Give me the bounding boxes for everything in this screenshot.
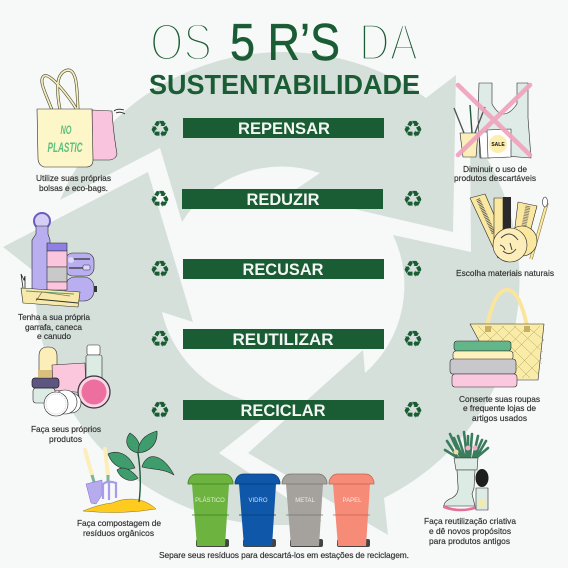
bin: metal <box>282 474 327 547</box>
caption: reuse: para produtos antigos <box>429 536 510 546</box>
caption: cosmetics <box>31 424 101 444</box>
illustration: recycling bins <box>188 474 374 547</box>
icons: recycling symbols right: ♻ <box>403 187 423 213</box>
caption: reuse: e dê novos propósitos <box>429 526 511 536</box>
bar: reutilizar <box>183 329 384 349</box>
caption: bottle: Tenha a sua própria <box>18 312 90 322</box>
illustration: plastic bag crossed out: SALE <box>491 142 505 148</box>
bin: vidro: VIDRO <box>248 498 268 504</box>
bin: papel: PAPEL <box>343 498 362 504</box>
caption: compost: Faça compostagem de <box>77 518 161 528</box>
illustration: plastic bag crossed out <box>454 83 531 158</box>
caption: clothes: artigos usados <box>472 413 527 423</box>
caption: bins: Separe seus resíduos para descartá-los em estações de reciclagem. <box>159 550 409 560</box>
title line 1: OS <box>150 14 212 72</box>
caption: bottle <box>18 312 90 341</box>
caption: disposable <box>454 164 536 183</box>
illustration: boot planter <box>443 432 488 511</box>
caption: compost <box>77 518 161 538</box>
bar: reciclar <box>183 400 384 420</box>
bar: recusar <box>183 259 384 279</box>
caption: bags: bolsas e eco-bags. <box>39 183 108 193</box>
bar: reduzir <box>182 189 383 209</box>
illustration: handbag and folded clothes <box>450 290 544 387</box>
bar: repensar <box>183 118 384 138</box>
caption: cosmetics: Faça seus próprios <box>31 424 101 434</box>
icons: recycling symbols left <box>150 117 170 424</box>
icons: recycling symbols left: ♻ <box>150 257 170 283</box>
caption: compost: resíduos orgânicos <box>83 528 154 538</box>
illustration: plant and garden tools <box>83 431 174 513</box>
bar: reciclar: RECICLAR <box>240 401 326 420</box>
title: 5 R’S <box>230 14 340 72</box>
title line 2: SUSTENTABILIDADE <box>149 69 420 100</box>
illustration: tote bags <box>37 70 125 167</box>
illustration: cosmetics <box>32 345 110 416</box>
icons: recycling symbols left: ♻ <box>150 327 170 353</box>
icons: recycling symbols left: ♻ <box>150 187 170 213</box>
caption: disposable: Diminuir o uso de <box>463 164 527 174</box>
caption: clothes: e frequente lojas de <box>463 403 536 413</box>
caption: bags: Utilize suas próprias <box>36 173 111 183</box>
icons: recycling symbols right: ♻ <box>403 327 423 353</box>
bin: papel <box>329 474 374 547</box>
illustration: tote bags: NO <box>60 123 72 137</box>
bin: plástico <box>188 474 233 547</box>
caption: cosmetics: produtos <box>49 434 82 444</box>
illustration: bottle, cup, straws <box>21 213 97 307</box>
title <box>150 14 418 72</box>
caption: clothes <box>459 394 540 423</box>
title: DA <box>359 14 418 72</box>
caption: bottle: e canudo <box>37 331 71 341</box>
bar: repensar: REPENSAR <box>238 119 330 138</box>
icons: recycling symbols left: ♻ <box>150 398 170 424</box>
bar: reduzir: REDUZIR <box>246 190 320 209</box>
illustration: natural combs and sponge <box>470 194 548 262</box>
bin: plástico: PLÁSTICO <box>195 497 225 504</box>
caption: bags <box>36 173 111 193</box>
bar: reutilizar: REUTILIZAR <box>232 330 334 349</box>
icons: recycling symbols left: ♻ <box>150 117 170 143</box>
caption: bottle: garrafa, caneca <box>25 322 82 332</box>
bin: vidro <box>235 474 280 547</box>
bar: recusar: RECUSAR <box>242 260 324 279</box>
icons: recycling symbols right <box>403 117 423 424</box>
caption: reuse <box>424 516 516 546</box>
caption: disposable: produtos descartáveis <box>454 173 536 183</box>
icons: recycling symbols right: ♻ <box>403 117 423 143</box>
icons: recycling symbols right: ♻ <box>403 398 423 424</box>
bin: metal: METAL <box>295 498 315 504</box>
caption: clothes: Conserte suas roupas <box>459 394 540 404</box>
caption: reuse: Faça reutilização criativa <box>424 516 516 526</box>
caption: natural materials: Escolha materiais naturais <box>456 268 554 278</box>
background recycling arrows <box>3 52 520 535</box>
illustration: tote bags: PLASTIC <box>48 139 83 155</box>
icons: recycling symbols right: ♻ <box>403 257 423 283</box>
